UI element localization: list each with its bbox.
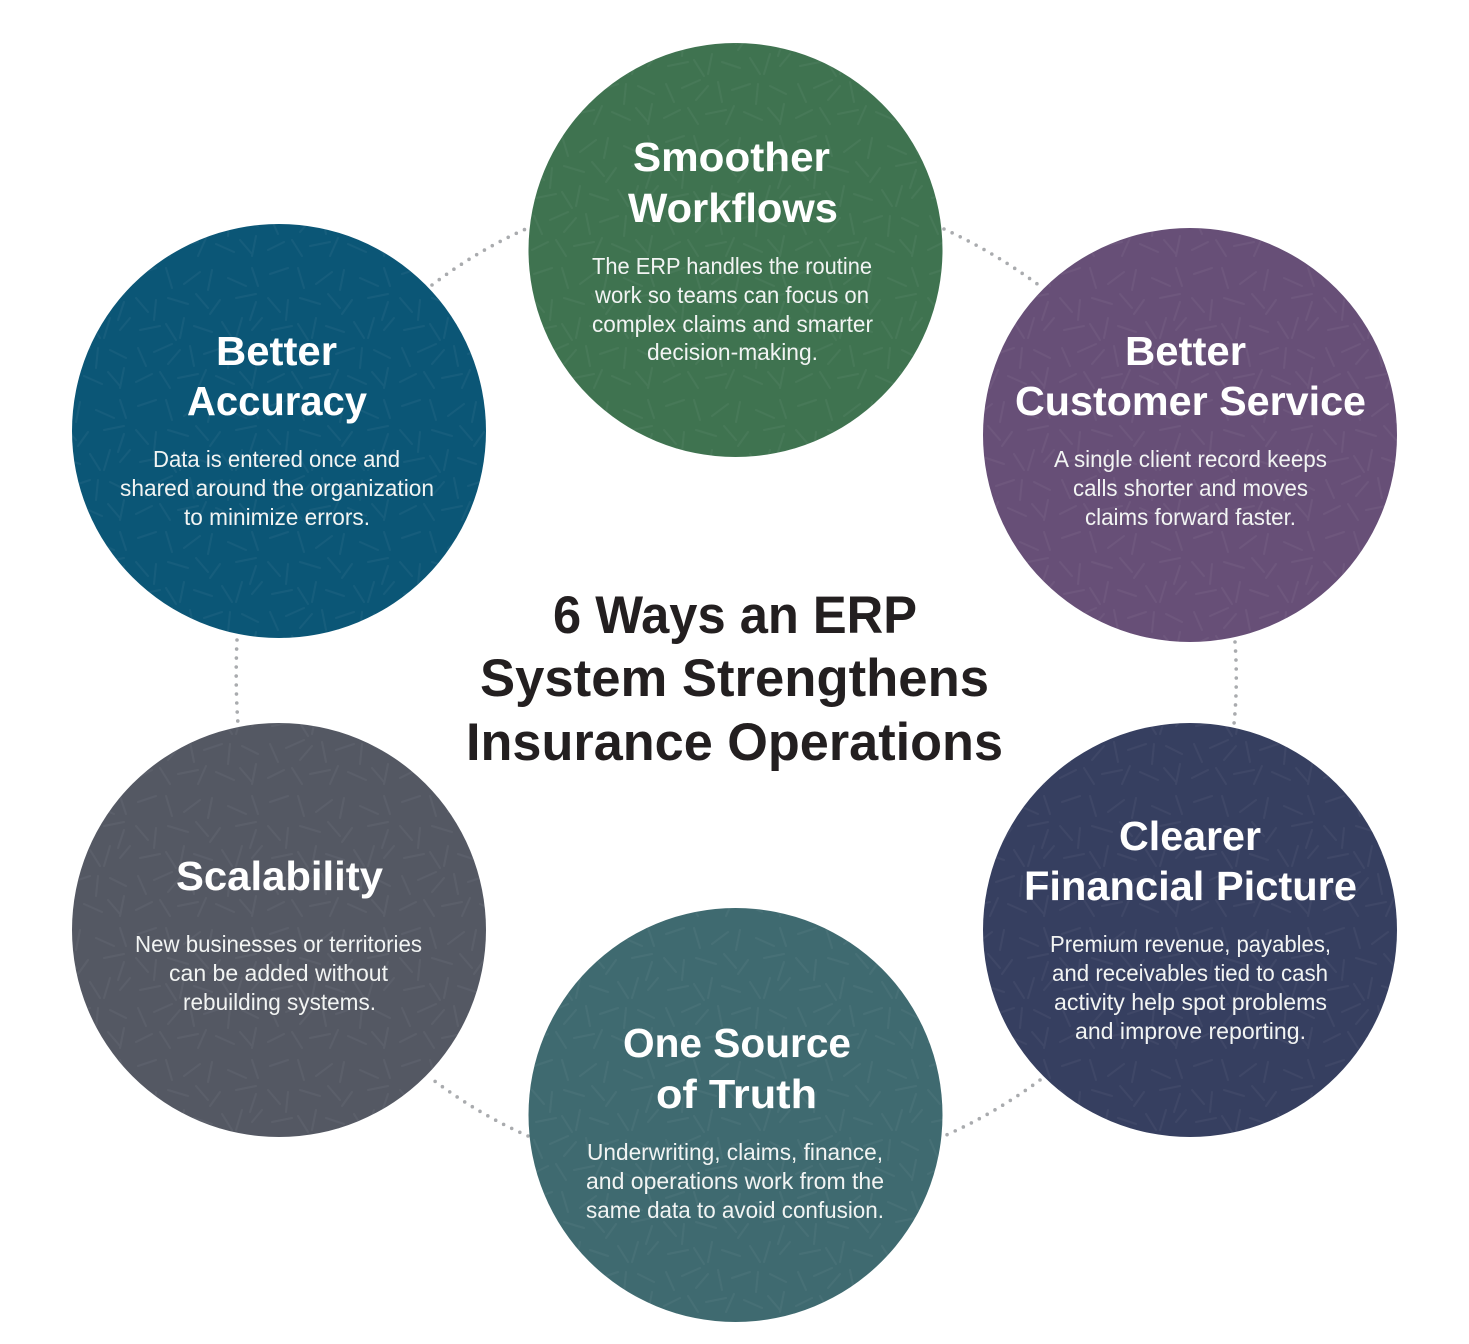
body text: clearer financial picture: and receivables tied to cash (1052, 960, 1328, 986)
body text: smoother workflows: work so teams can focus on (594, 282, 869, 308)
heading: smoother workflows (628, 134, 838, 231)
gray circle (72, 723, 486, 1137)
title (466, 586, 1003, 772)
body text: clearer financial picture: activity help spot problems (1054, 989, 1327, 1015)
heading: better accuracy: Better (216, 328, 337, 374)
body text: one source of truth: Underwriting, claims, finance, (587, 1139, 883, 1165)
body text: one source of truth: and operations work from the (586, 1168, 884, 1194)
panel: one source of truth (528, 908, 942, 1322)
heading: clearer financial picture: Financial Picture (1024, 863, 1357, 909)
body text: better customer service (1054, 446, 1327, 530)
navy circle (983, 723, 1397, 1137)
dotted connector ring (236, 228, 1236, 1136)
body text: better accuracy: to minimize errors. (184, 504, 370, 530)
body text: scalability: can be added without (169, 960, 389, 986)
body text: smoother workflows: The ERP handles the routine (592, 253, 872, 279)
heading: better customer service (1015, 328, 1366, 424)
body text: clearer financial picture (1050, 931, 1331, 1044)
body text: smoother workflows: complex claims and smarter (592, 311, 873, 337)
body text: smoother workflows: decision-making. (647, 339, 818, 365)
panel: better customer service (983, 228, 1397, 642)
heading: better customer service: Better (1125, 328, 1246, 374)
body text: better customer service: calls shorter and moves (1073, 475, 1308, 501)
body text: better accuracy: shared around the organization (120, 475, 434, 501)
heading: one source of truth: One Source (623, 1020, 851, 1066)
heading: one source of truth (623, 1020, 851, 1117)
heading: smoother workflows: Smoother (633, 134, 830, 180)
title: Insurance Operations (466, 713, 1003, 772)
title: System Strengthens (480, 649, 989, 708)
panel: scalability (72, 723, 486, 1137)
heading: smoother workflows: Workflows (628, 185, 838, 231)
body text: one source of truth: same data to avoid confusion. (586, 1197, 884, 1223)
heading: better accuracy: Accuracy (187, 378, 367, 424)
panel: clearer financial picture (983, 723, 1397, 1137)
heading: one source of truth: of Truth (656, 1071, 817, 1117)
body text: clearer financial picture: Premium revenue, payables, (1050, 931, 1331, 957)
title: 6 Ways an ERP (553, 586, 917, 645)
body text: scalability: rebuilding systems. (183, 989, 376, 1015)
heading: better customer service: Customer Service (1015, 378, 1366, 424)
panel: better accuracy (72, 224, 486, 638)
heading: clearer financial picture: Clearer (1119, 813, 1261, 859)
body text: one source of truth (586, 1139, 884, 1223)
body text: smoother workflows (592, 253, 873, 365)
heading: better accuracy (187, 328, 367, 424)
green circle (528, 43, 942, 457)
panel: smoother workflows (528, 43, 942, 457)
purple circle (983, 228, 1397, 642)
body text: scalability: New businesses or territories (135, 931, 422, 957)
heading: scalability: Scalability (176, 853, 383, 899)
body text: better customer service: claims forward faster. (1085, 504, 1296, 530)
body text: scalability (135, 931, 422, 1015)
teal circle (528, 908, 942, 1322)
body text: clearer financial picture: and improve reporting. (1075, 1018, 1306, 1044)
body text: better accuracy (120, 446, 434, 530)
body text: better customer service: A single client record keeps (1054, 446, 1327, 472)
heading: clearer financial picture (1024, 813, 1357, 909)
blue circle (72, 224, 486, 638)
body text: better accuracy: Data is entered once and (153, 446, 400, 472)
